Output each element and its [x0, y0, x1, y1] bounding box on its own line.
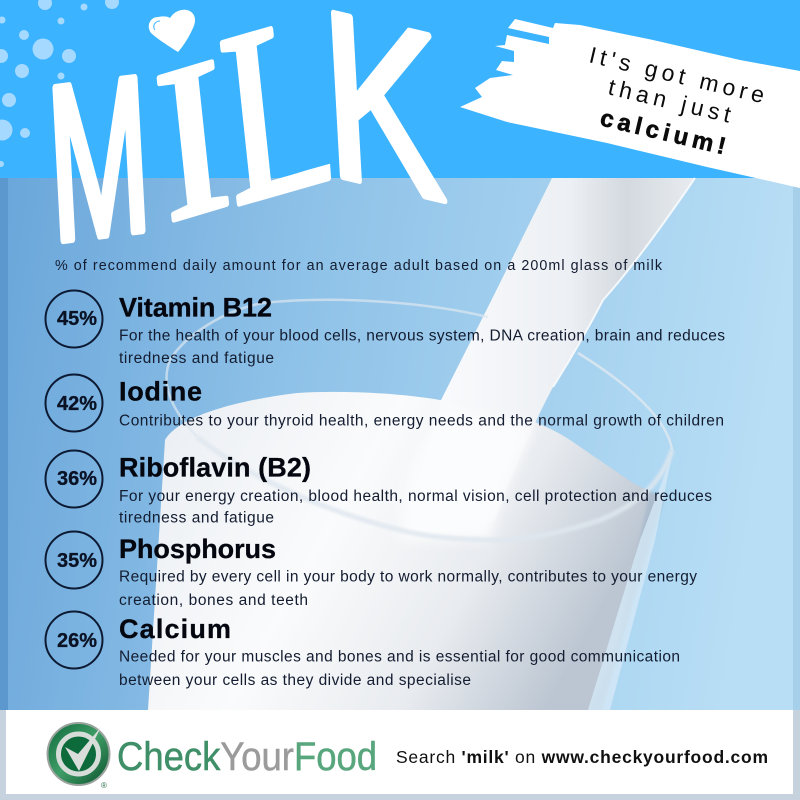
nutrient: Iodine: Iodine: [119, 376, 202, 406]
nutrient: Riboflavin: 36%: [57, 468, 97, 490]
tagline: than just: [606, 74, 734, 128]
nutrient: Vitamin B12: 45%: [57, 308, 97, 330]
nutrient: Calcium: Calcium: [119, 614, 231, 644]
search call to action: Search 'milk' on www.checkyourfood.com: [396, 747, 768, 767]
brand name: CheckYourFood: [117, 735, 377, 779]
nutrient: Phosphorus: Phosphorus: [119, 534, 276, 564]
nutrient: Phosphorus: creation, bones and teeth: [119, 592, 308, 609]
nutrient: Iodine: Contributes to your thyroid health, energy needs and the normal growth of children: [119, 412, 724, 430]
header background: [0, 0, 800, 178]
nutrient: Calcium: Needed for your muscles and bones and is essential for good communication: [119, 648, 680, 666]
icon: CheckYourFood logo: [48, 723, 110, 790]
nutrient: Riboflavin: [46, 450, 712, 526]
tagline: It's got more: [587, 42, 767, 108]
nutrient: Vitamin B12: [46, 290, 725, 367]
nutrient: Phosphorus: 35%: [57, 550, 97, 572]
title: MILK: [42, 0, 449, 288]
icon: heart: [149, 10, 195, 52]
nutrient: Vitamin B12: For the health of your blood cells, nervous system, DNA creation, brain and reduces: [119, 328, 725, 344]
intro note: % of recommend daily amount for an average adult based on a 200ml glass of milk: [55, 258, 663, 274]
nutrient: Iodine: 42%: [57, 393, 97, 415]
title: MILK: I: [147, 10, 239, 270]
nutrient: Phosphorus: [46, 532, 697, 609]
brush banner: [460, 19, 800, 188]
decorative bubbles: [0, 0, 119, 167]
icon: CheckYourFood logo: ®: [101, 781, 107, 790]
photo: milk pouring into a glass: [0, 178, 800, 710]
nutrient: Riboflavin: tiredness and fatigue: [119, 510, 274, 526]
nutrient: Vitamin B12: tiredness and fatigue: [119, 350, 274, 367]
nutrient: Riboflavin: For your energy creation, blood health, normal vision, cell protection and reduces: [119, 488, 712, 505]
nutrient: Riboflavin: Riboflavin (B2): [119, 452, 311, 482]
footer bar: [6, 710, 793, 794]
nutrient: Vitamin B12: Vitamin B12: [119, 292, 272, 322]
title: MILK: M: [42, 29, 155, 288]
nutrient: Calcium: between your cells as they divide and specialise: [119, 672, 471, 689]
tagline: [587, 42, 767, 160]
nutrient: Calcium: 26%: [57, 630, 97, 652]
nutrient: Iodine: [46, 374, 724, 432]
nutrient: Calcium: [46, 612, 680, 689]
nutrient: Phosphorus: Required by every cell in your body to work normally, contributes to your energy: [119, 568, 697, 586]
tagline: calcium!: [598, 105, 728, 160]
